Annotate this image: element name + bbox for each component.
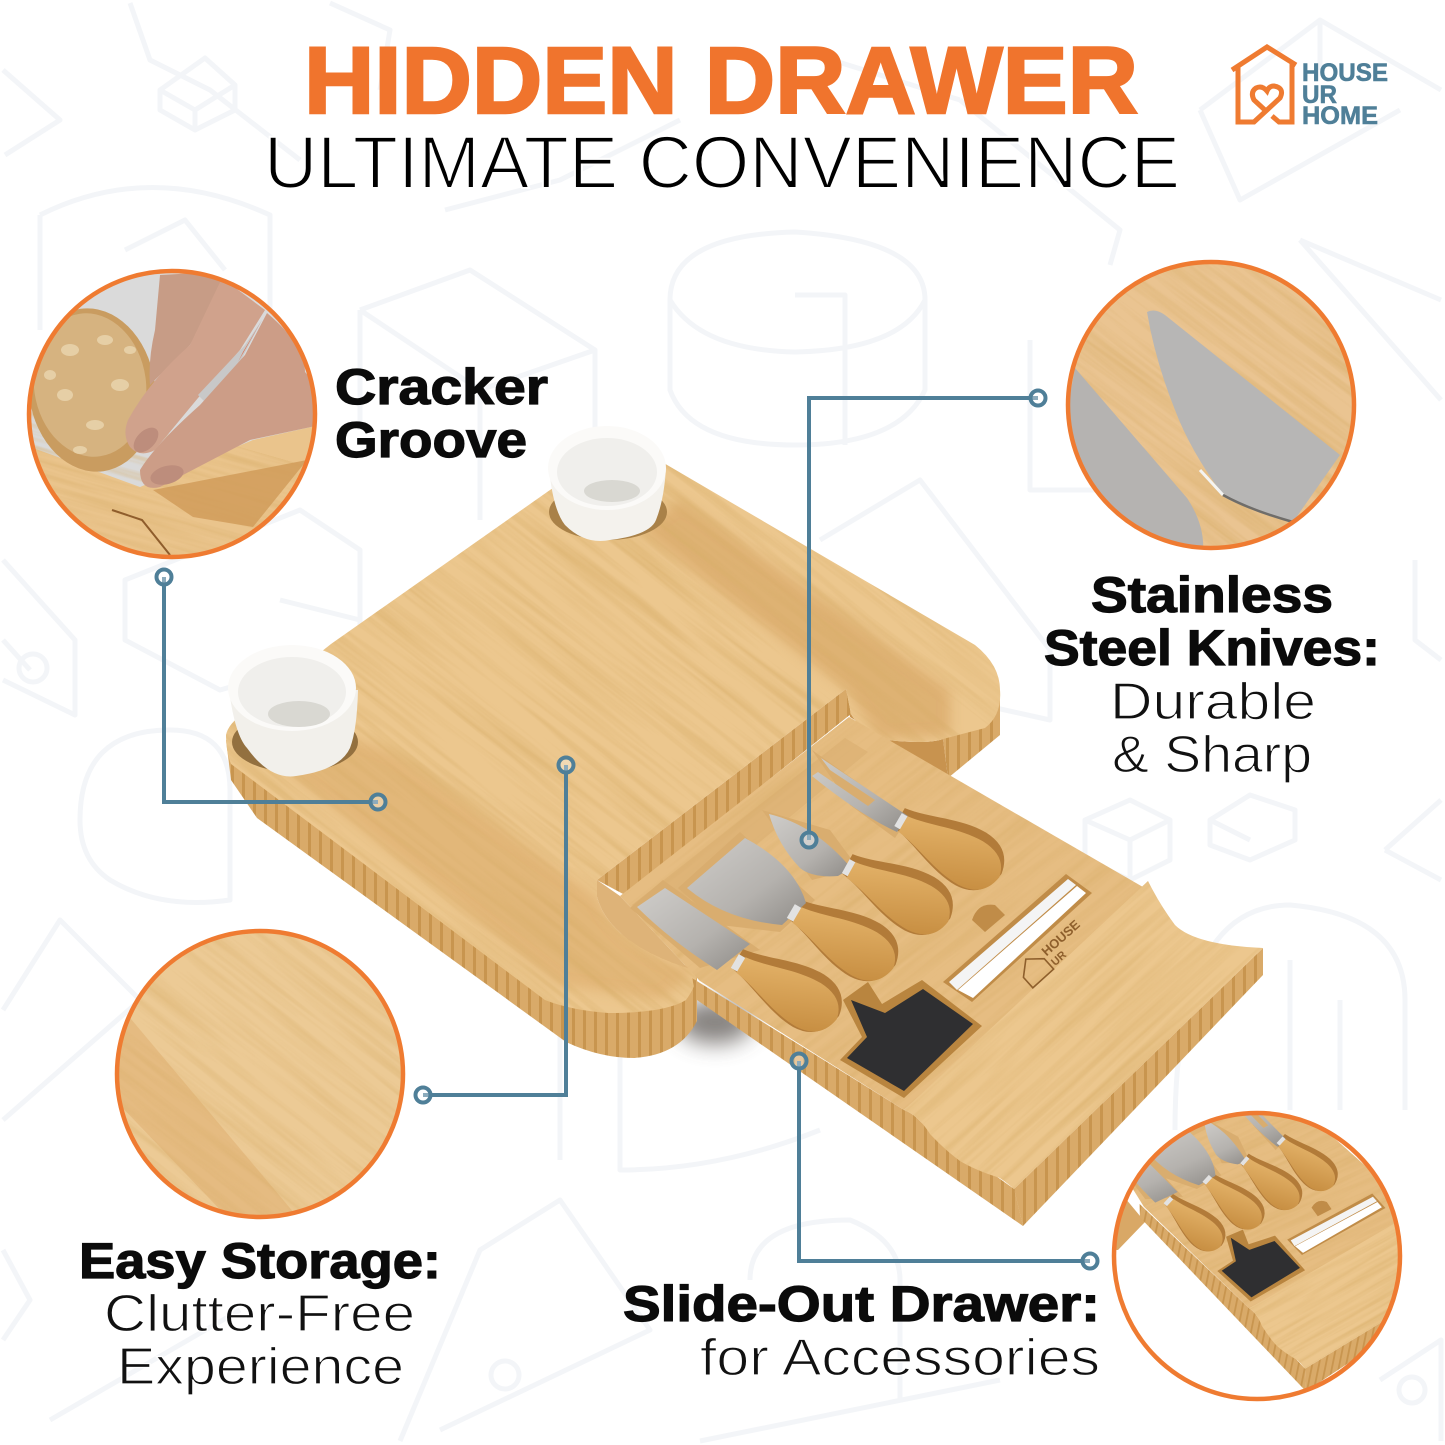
label: slide-out drawer: for Accessories [700, 1329, 1100, 1387]
drawer with knives, slate and chalk [449, 509, 1353, 1331]
inset circle: drawer contents [1112, 1110, 1402, 1402]
subheading: ultimate convenience: ULTIMATE CONVENIENCE [264, 121, 1180, 204]
label: stainless steel knives: Stainless [1091, 567, 1333, 623]
board body [226, 464, 1000, 1058]
label: stainless steel knives: Durable [1110, 673, 1316, 731]
logo: House Ur Home: HOME [1302, 102, 1378, 130]
bamboo cheese board with slide-out drawer [226, 438, 1263, 1226]
icon: house with heart [1232, 47, 1296, 122]
title [264, 28, 1180, 204]
logo: House Ur Home: HOUSE [1302, 59, 1388, 87]
label: slide-out drawer: Slide-Out Drawer: [623, 1276, 1100, 1332]
inset circle: stainless steel knives [1066, 260, 1356, 550]
label: easy storage: Clutter-Free [104, 1285, 415, 1343]
connector: easy storage [416, 758, 574, 1102]
connector: stainless steel knives [802, 390, 1046, 848]
label: stainless steel knives: Steel Knives: [1044, 620, 1380, 676]
label: stainless steel knives: & Sharp [1112, 726, 1312, 784]
connector: cracker groove [156, 570, 386, 810]
engraved logo on drawer: HOUSE [1038, 917, 1083, 959]
label: easy storage [79, 1233, 441, 1396]
label: slide-out drawer [623, 1276, 1100, 1387]
label: stainless steel knives [1044, 567, 1380, 784]
label: cracker groove: Cracker [335, 359, 548, 415]
engraved logo on drawer [1015, 917, 1092, 989]
logo: House Ur Home [1232, 47, 1388, 130]
connector: slide-out drawer [792, 1054, 1098, 1268]
inset circle: bamboo surface [114, 928, 406, 1220]
logo: House Ur Home: UR [1302, 81, 1337, 109]
label: easy storage: Easy Storage: [79, 1233, 441, 1289]
engraved logo on drawer: UR [1049, 949, 1069, 969]
label: cracker groove [335, 359, 548, 468]
label: cracker groove: Groove [335, 412, 527, 468]
ramekin front [228, 645, 358, 776]
label: easy storage: Experience [117, 1338, 404, 1396]
heading: hidden drawer: HIDDEN DRAWER [304, 28, 1138, 134]
ramekin back [548, 426, 667, 541]
inset circle: cracker groove [26, 268, 318, 560]
